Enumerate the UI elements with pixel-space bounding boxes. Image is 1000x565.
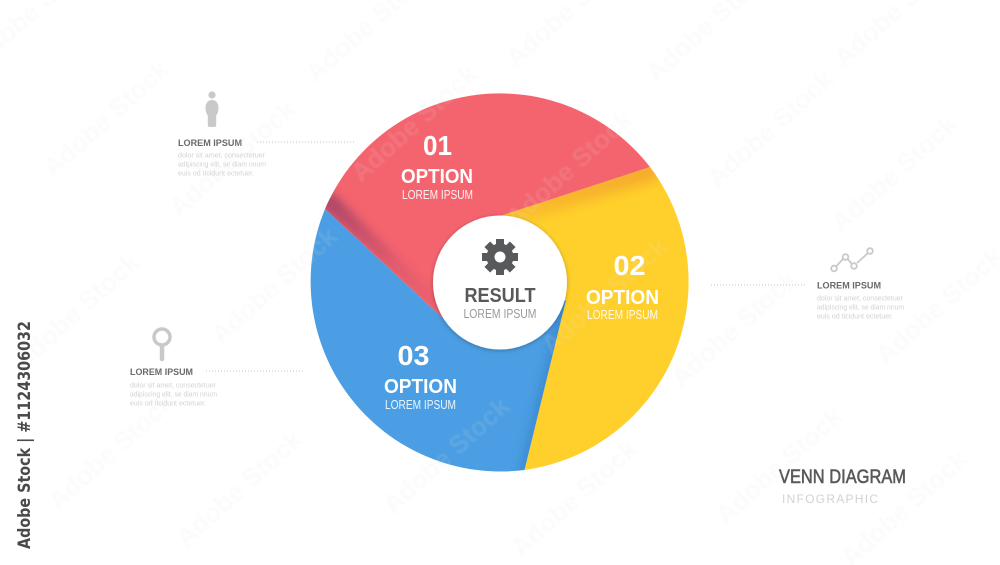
- title: [779, 467, 906, 506]
- label: option 01: 01: [423, 130, 452, 161]
- body text: adipiscing elit, se diam nnum: [130, 390, 217, 398]
- label: option 01: LOREM IPSUM: [402, 188, 473, 202]
- center circle: [433, 216, 567, 350]
- body text: [130, 380, 217, 408]
- callout: line chart: [711, 248, 904, 320]
- heading: LOREM IPSUM: [817, 280, 881, 292]
- title: VENN DIAGRAM: [779, 467, 906, 488]
- body text: euis od ticidunt ectetuer.: [817, 312, 893, 320]
- body text: dolor sit amet, consectetuer: [178, 150, 266, 160]
- watermark pattern: Adobe Stock: [7, 247, 145, 376]
- title: INFOGRAPHIC: [782, 492, 878, 506]
- watermark pattern: Adobe Stock: [701, 64, 839, 193]
- watermark pattern: Adobe Stock: [535, 231, 673, 360]
- callout: person: [178, 91, 354, 178]
- body text: adipiscing elit, se diam nnum: [817, 302, 904, 312]
- watermark pattern: Adobe Stock: [500, 104, 638, 233]
- label: option 03: LOREM IPSUM: [385, 398, 456, 412]
- watermark pattern: Adobe Stock: [505, 434, 643, 563]
- label: option 01: OPTION: [401, 166, 473, 188]
- segment: yellow: [490, 158, 689, 470]
- icon: gear: [482, 239, 518, 275]
- body text: dolor sit amet, consectetuer: [817, 294, 903, 302]
- watermark pattern: Adobe Stock: [42, 387, 180, 516]
- watermark pattern: Adobe Stock: [377, 391, 515, 520]
- icon: magnifier: [154, 329, 170, 359]
- infographic canvas: [17, 91, 905, 549]
- label: option 01: [401, 130, 473, 202]
- icon: person: [206, 91, 218, 127]
- label: option 02: [586, 250, 659, 322]
- body text: euis od ticidunt ectetuer.: [130, 398, 206, 408]
- icon: line chart: [831, 248, 873, 271]
- label: option 02: LOREM IPSUM: [587, 308, 658, 322]
- segment: blue: [311, 209, 572, 475]
- watermark pattern: Adobe Stock: [665, 264, 803, 393]
- label: option 03: [384, 340, 457, 412]
- label: option 02: OPTION: [586, 287, 659, 309]
- segment: red: [318, 93, 650, 330]
- heading: LOREM IPSUM: [178, 138, 242, 149]
- center text: LOREM IPSUM: [464, 307, 536, 321]
- center text: [464, 285, 536, 321]
- label: option 03: OPTION: [384, 376, 457, 398]
- watermark pattern: Adobe Stock: [825, 109, 963, 238]
- side credit: Adobe Stock | #1124306032: [15, 321, 35, 549]
- watermark pattern: Adobe Stock: [163, 94, 301, 223]
- body text: adipiscing elit, se diam nnum: [178, 160, 266, 168]
- body text: euis od ticidunt ectetuer.: [178, 168, 254, 178]
- body text: dolor sit amet, consectetuer: [130, 380, 216, 390]
- label: option 02: 02: [614, 250, 646, 281]
- label: option 03: 03: [398, 340, 430, 371]
- watermark pattern: Adobe Stock: [170, 424, 308, 553]
- heading: LOREM IPSUM: [130, 367, 193, 378]
- watermark pattern: Adobe Stock: [205, 221, 343, 350]
- watermark pattern: Adobe Stock: [37, 54, 175, 183]
- watermark pattern: Adobe Stock: [710, 401, 848, 530]
- center text: RESULT: [464, 285, 536, 307]
- body text: [817, 294, 904, 320]
- watermark pattern: Adobe Stock: [345, 59, 483, 188]
- pie chart: [311, 93, 689, 475]
- body text: [178, 150, 266, 178]
- callout: magnifier: [130, 329, 305, 408]
